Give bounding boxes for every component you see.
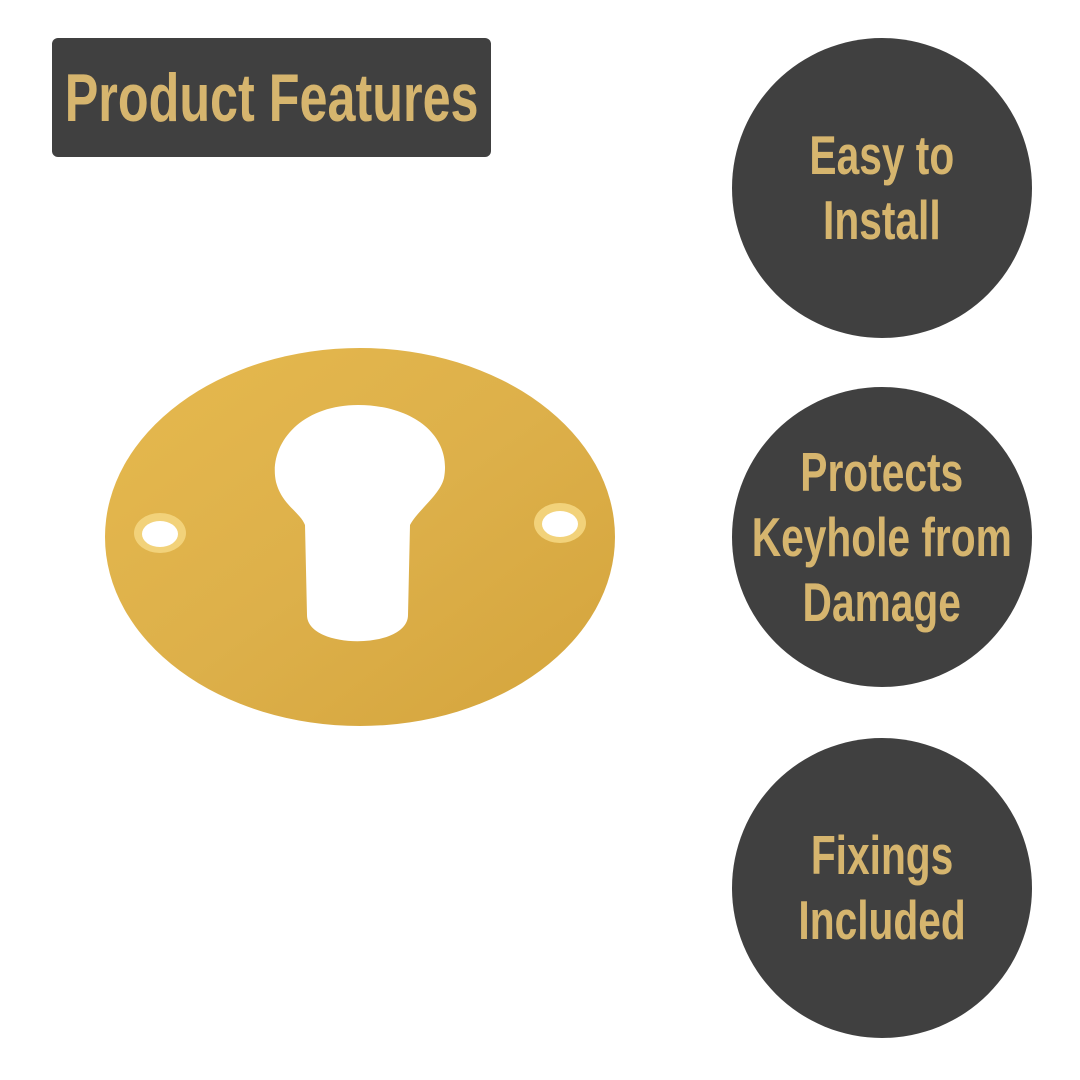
feature: fixings included: Fixings: [811, 824, 953, 886]
title: [52, 38, 491, 157]
feature: easy to install: [732, 38, 1032, 338]
feature: protects keyhole: [732, 387, 1032, 687]
feature: easy to install: Install: [823, 189, 941, 251]
feature: protects keyhole: Keyhole from: [752, 506, 1012, 568]
feature: fixings included: Included: [798, 889, 966, 951]
feature: protects keyhole: Damage: [803, 570, 961, 632]
feature: easy to install: Easy to: [810, 124, 954, 186]
title: Product Features: [65, 60, 478, 136]
feature: fixings included: [732, 738, 1032, 1038]
feature: protects keyhole: Protects: [801, 440, 963, 502]
